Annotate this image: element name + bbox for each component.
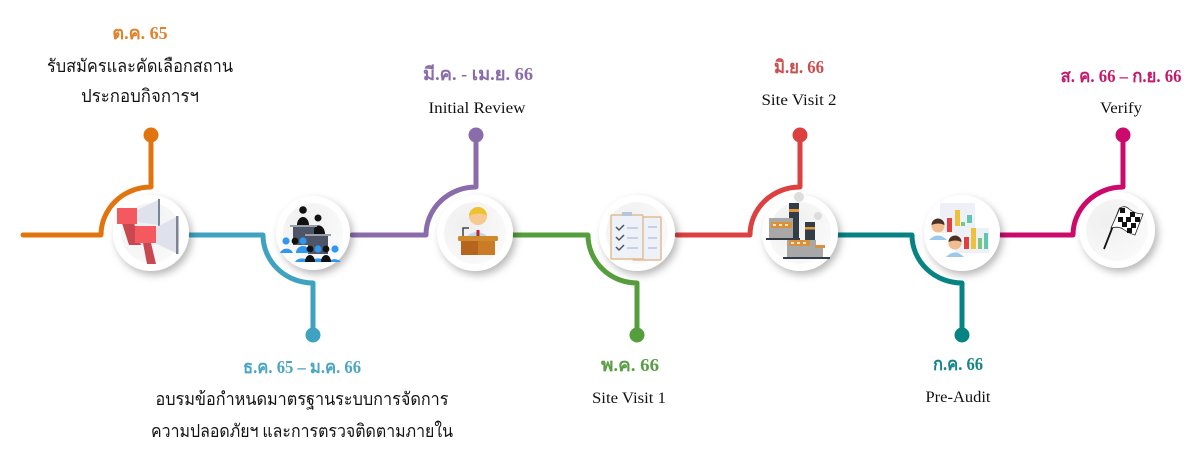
- icon: megaphones: [113, 195, 189, 271]
- label: step 3: Initial Review: [428, 100, 526, 117]
- label: step 1: [47, 23, 233, 106]
- icon: clipboards: [599, 195, 675, 271]
- connector: blue: [190, 235, 320, 342]
- connector: magenta: [1001, 128, 1130, 235]
- label: step 2: ความปลอดภัยฯ และการตรวจติดตามภายใน: [151, 420, 453, 441]
- label: step 7: ส. ค. 66 – ก.ย. 66: [1060, 66, 1182, 86]
- label: step 4: [592, 355, 666, 407]
- label: step 2: ธ.ค. 65 – ม.ค. 66: [243, 357, 361, 377]
- label: step 6: Pre-Audit: [926, 389, 991, 406]
- label: step 6: [926, 354, 991, 406]
- label: step 4: พ.ค. 66: [601, 355, 659, 375]
- connector: green: [513, 235, 644, 342]
- connector: purple: [352, 128, 484, 235]
- label: step 7: [1060, 66, 1182, 117]
- label: step 5: มิ.ย. 66: [774, 57, 824, 77]
- connector: teal: [838, 235, 970, 342]
- icon: training audience: [276, 196, 350, 270]
- icon: speaker at podium: [437, 195, 513, 271]
- connector: orange: [23, 128, 158, 235]
- label: step 4: Site Visit 1: [592, 390, 666, 407]
- label: step 5: Site Visit 2: [762, 92, 836, 109]
- label: step 5: [762, 57, 836, 109]
- label: step 1: ประกอบกิจการฯ: [81, 86, 199, 106]
- icon: analysts with charts: [924, 195, 1000, 271]
- label: step 3: มี.ค. - เม.ย. 66: [423, 64, 533, 84]
- label: step 6: ก.ค. 66: [933, 354, 983, 374]
- label: step 1: รับสมัครและคัดเลือกสถาน: [47, 56, 233, 76]
- icon: factories: [762, 192, 838, 271]
- label: step 2: อบรมข้อกำหนดมาตรฐานระบบการจัดการ: [156, 389, 449, 410]
- label: step 7: Verify: [1100, 100, 1142, 117]
- icon: checkered flag: [1079, 192, 1155, 268]
- label: step 1: ต.ค. 65: [112, 23, 168, 43]
- connector: red: [677, 128, 808, 235]
- label: step 3: [423, 64, 533, 117]
- label: step 2: [151, 357, 453, 441]
